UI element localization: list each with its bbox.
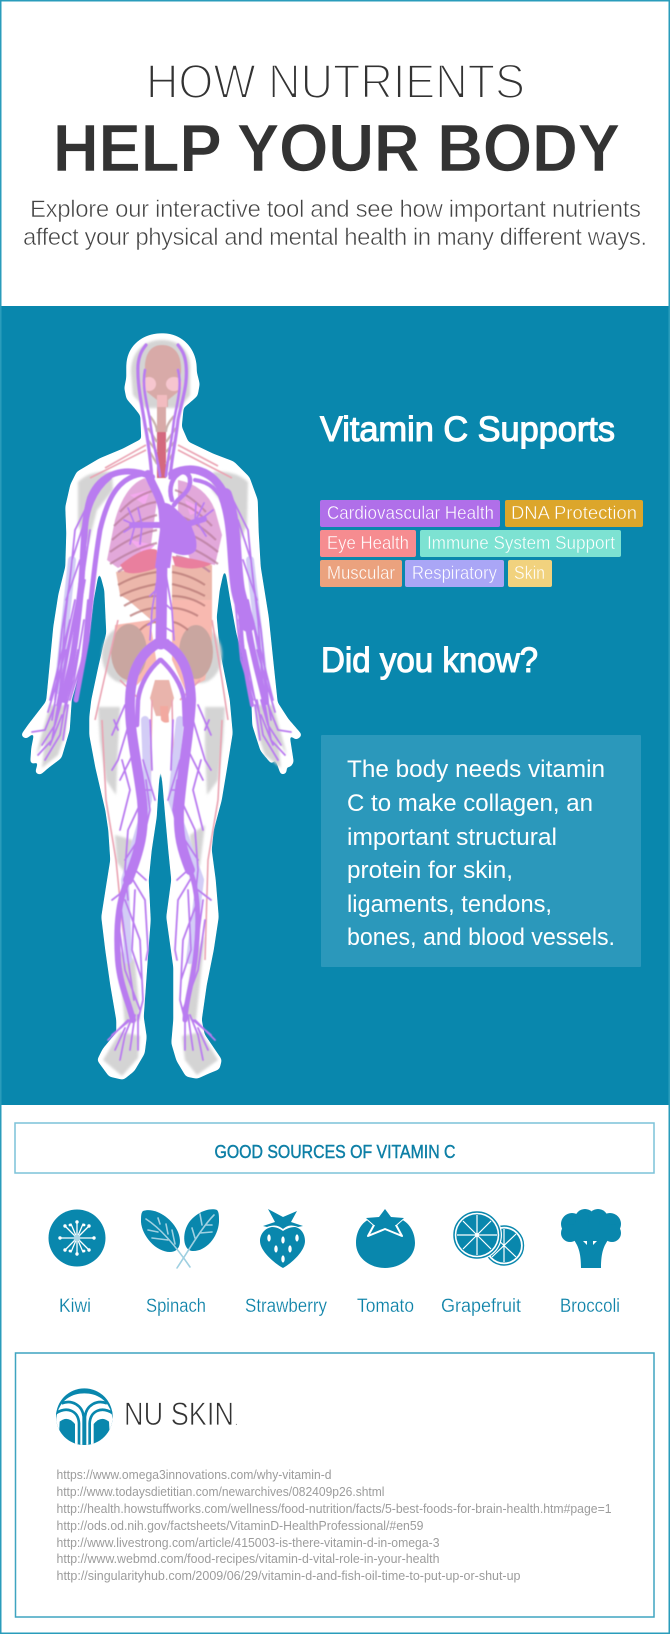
reference urls: http://singularityhub.com/2009/06/29/vitamin-d-and-fish-oil-time-to-put-up-or-shut-up	[56, 1568, 520, 1583]
icon: grapefruit	[452, 1210, 524, 1265]
abdomen organs	[116, 565, 157, 625]
reference urls: http://ods.od.nih.gov/factsheets/VitaminD-HealthProfessional/#en59	[56, 1518, 424, 1533]
icon: spinach	[141, 1209, 219, 1268]
fact text	[347, 756, 615, 951]
reference urls	[56, 1467, 612, 1583]
fact text: ligaments, tendons,	[347, 891, 552, 918]
title line 2: HELP YOUR BODY	[53, 111, 620, 186]
reference urls: http://www.webmd.com/food-recipes/vitamin-d-vital-role-in-your-health	[56, 1551, 440, 1566]
fact text: important structural	[347, 824, 557, 851]
sources heading box	[15, 1123, 654, 1173]
food labels: Grapefruit	[441, 1296, 522, 1317]
tag: eye health	[320, 530, 416, 557]
tag: respiratory	[405, 560, 504, 587]
food labels: Kiwi	[59, 1296, 91, 1317]
tag: dna protection: DNA Protection	[511, 503, 637, 523]
heading: vitamin c supports: Vitamin C Supports	[320, 410, 615, 449]
fact text: protein for skin,	[347, 857, 513, 884]
reference urls: http://health.howstuffworks.com/wellness/food-nutrition/facts/5-best-foods-for-brain-health.htm#page=1	[56, 1501, 612, 1516]
spine and oesophagus	[157, 407, 166, 433]
icon: broccoli	[561, 1209, 621, 1268]
pelvis	[150, 680, 174, 716]
fact text: C to make collagen, an	[347, 790, 593, 817]
tag: respiratory: Respiratory	[412, 563, 497, 583]
footer panel	[16, 1353, 654, 1617]
tag: skin	[508, 560, 552, 587]
benefit tags	[320, 500, 643, 587]
intro text: affect your physical and mental health in many different ways.	[23, 224, 647, 251]
tag: dna protection	[505, 500, 643, 527]
food labels: Spinach	[146, 1296, 206, 1317]
tag: muscular: Muscular	[327, 563, 395, 583]
grey bones and muscle	[36, 340, 287, 1076]
left arm vessels	[64, 472, 152, 700]
food labels: Tomato	[357, 1296, 414, 1317]
food labels: Strawberry	[245, 1296, 327, 1317]
right leg vessels	[162, 642, 191, 870]
lung highlights	[130, 490, 205, 555]
reference urls: http://www.livestrong.com/article/415003-is-there-vitamin-d-in-omega-3	[56, 1535, 440, 1550]
lavender vein underlay	[58, 560, 265, 960]
reference urls: https://www.omega3innovations.com/why-vitamin-d	[56, 1467, 332, 1482]
food labels	[59, 1296, 620, 1317]
logo: nu skin wordmark: .	[235, 1417, 238, 1428]
main purple vessels	[58, 345, 266, 1020]
tag: immune system support: Immune System Support	[427, 533, 615, 553]
pink arteries	[90, 445, 232, 960]
left leg vessels	[128, 642, 160, 880]
neck vessels	[138, 345, 152, 478]
neck ribs	[148, 416, 176, 464]
sources heading box: GOOD SOURCES OF VITAMIN C	[214, 1141, 456, 1162]
pelvic vessels	[137, 660, 185, 725]
icon: kiwi	[48, 1210, 106, 1266]
lungs	[107, 478, 157, 568]
icon: strawberry	[260, 1209, 305, 1268]
soft inner anatomy	[32, 345, 291, 1060]
diaphragm	[120, 549, 157, 573]
fact text: bones, and blood vessels.	[347, 924, 615, 951]
fact text: The body needs vitamin	[347, 756, 605, 783]
human body figure	[23, 335, 300, 1078]
logo: nu skin mark	[56, 1388, 113, 1445]
skull and face	[145, 345, 181, 407]
tag: skin: Skin	[514, 563, 545, 583]
tag: muscular	[320, 560, 402, 587]
ribs	[110, 490, 218, 630]
right arm vessels	[225, 495, 248, 625]
tag: eye health: Eye Health	[327, 533, 409, 553]
intro text	[23, 196, 647, 251]
heading: did you know: Did you know?	[321, 641, 538, 680]
spinach stems	[146, 1214, 214, 1268]
heart and lung vessels	[155, 503, 197, 568]
icon: tomato	[356, 1206, 415, 1268]
hip bones	[111, 624, 147, 680]
logo: nu skin wordmark: NU SKIN	[124, 1396, 234, 1432]
fact box	[321, 735, 641, 967]
title line 1: HOW NUTRIENTS	[146, 56, 525, 109]
intro text: Explore our interactive tool and see how important nutrients	[30, 196, 641, 223]
tag: cardiovascular health: Cardiovascular Health	[327, 503, 494, 523]
reference urls: http://www.todaysdietitian.com/newarchives/082409p26.shtml	[56, 1484, 385, 1499]
body silhouette	[23, 335, 300, 1078]
header block	[23, 56, 647, 251]
teal main panel	[0, 306, 670, 1105]
food labels: Broccoli	[560, 1296, 620, 1317]
thin branches	[32, 500, 291, 1060]
